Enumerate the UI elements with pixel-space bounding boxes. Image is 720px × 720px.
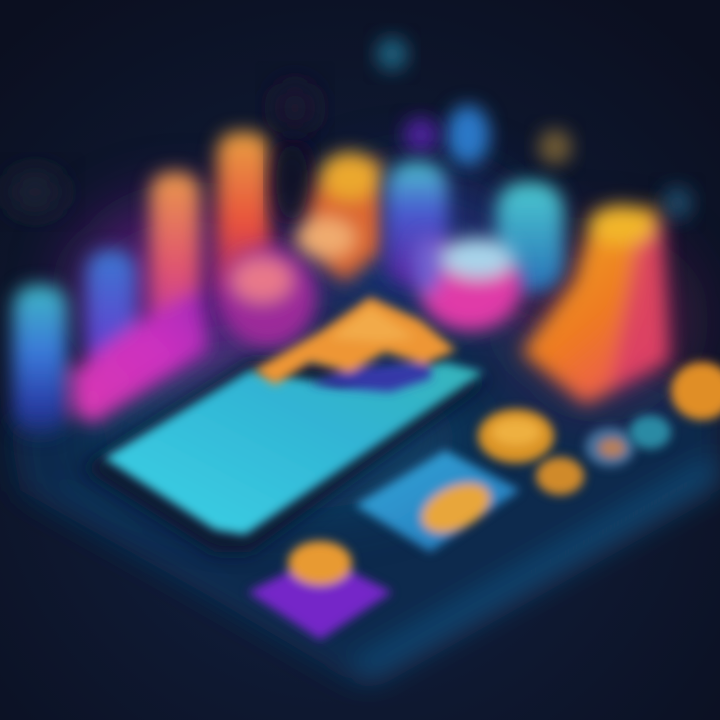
tablet: cyan screen bbox=[104, 362, 484, 535]
particle: purple orb bbox=[403, 117, 439, 153]
coin: large amber bbox=[478, 409, 554, 463]
floating particles bbox=[7, 37, 693, 220]
coin: orange right edge bbox=[671, 362, 720, 420]
coin: muted slate and orange bbox=[585, 427, 635, 467]
bar: orange bbox=[150, 172, 200, 342]
chart: teal bar bbox=[496, 182, 564, 292]
tablet: dark body bbox=[82, 360, 490, 552]
particle: dim orb top bbox=[273, 82, 317, 134]
icon: orange pill bbox=[414, 474, 498, 542]
bar: blue bbox=[86, 250, 136, 370]
chart: dark gap between bars bbox=[276, 138, 308, 226]
card: purple bbox=[248, 541, 392, 640]
particle: teal square bbox=[376, 37, 408, 71]
chart: orange pyramid right bbox=[522, 205, 670, 405]
chart: orange cluster bbox=[295, 152, 382, 282]
coin: small amber bbox=[536, 457, 584, 495]
platform: isometric base bbox=[10, 230, 720, 682]
particle: amber orb bbox=[538, 129, 572, 165]
particle: dim orb left bbox=[7, 170, 63, 214]
card: blue bbox=[355, 450, 520, 552]
chart: pink sphere bbox=[413, 235, 522, 331]
glow: behind charts bbox=[70, 170, 690, 510]
area: orange mountain bbox=[254, 297, 456, 385]
chart: magenta sphere bbox=[220, 247, 316, 347]
chart: layered area on tablet bbox=[254, 297, 456, 392]
chart: purple cyan bar bbox=[386, 162, 448, 287]
area: amber ridge bbox=[330, 307, 415, 342]
icon: orange coin bbox=[288, 541, 352, 585]
chart group: left bars bbox=[13, 132, 270, 435]
bar: cyan bbox=[13, 285, 67, 435]
area: magenta wedge bbox=[72, 290, 208, 425]
particle: slate orb right bbox=[661, 186, 693, 220]
area: blue wave bbox=[310, 362, 432, 392]
bar: orange red bbox=[217, 132, 270, 302]
coin: teal bbox=[629, 415, 671, 449]
particle: blue orb bbox=[446, 105, 490, 165]
